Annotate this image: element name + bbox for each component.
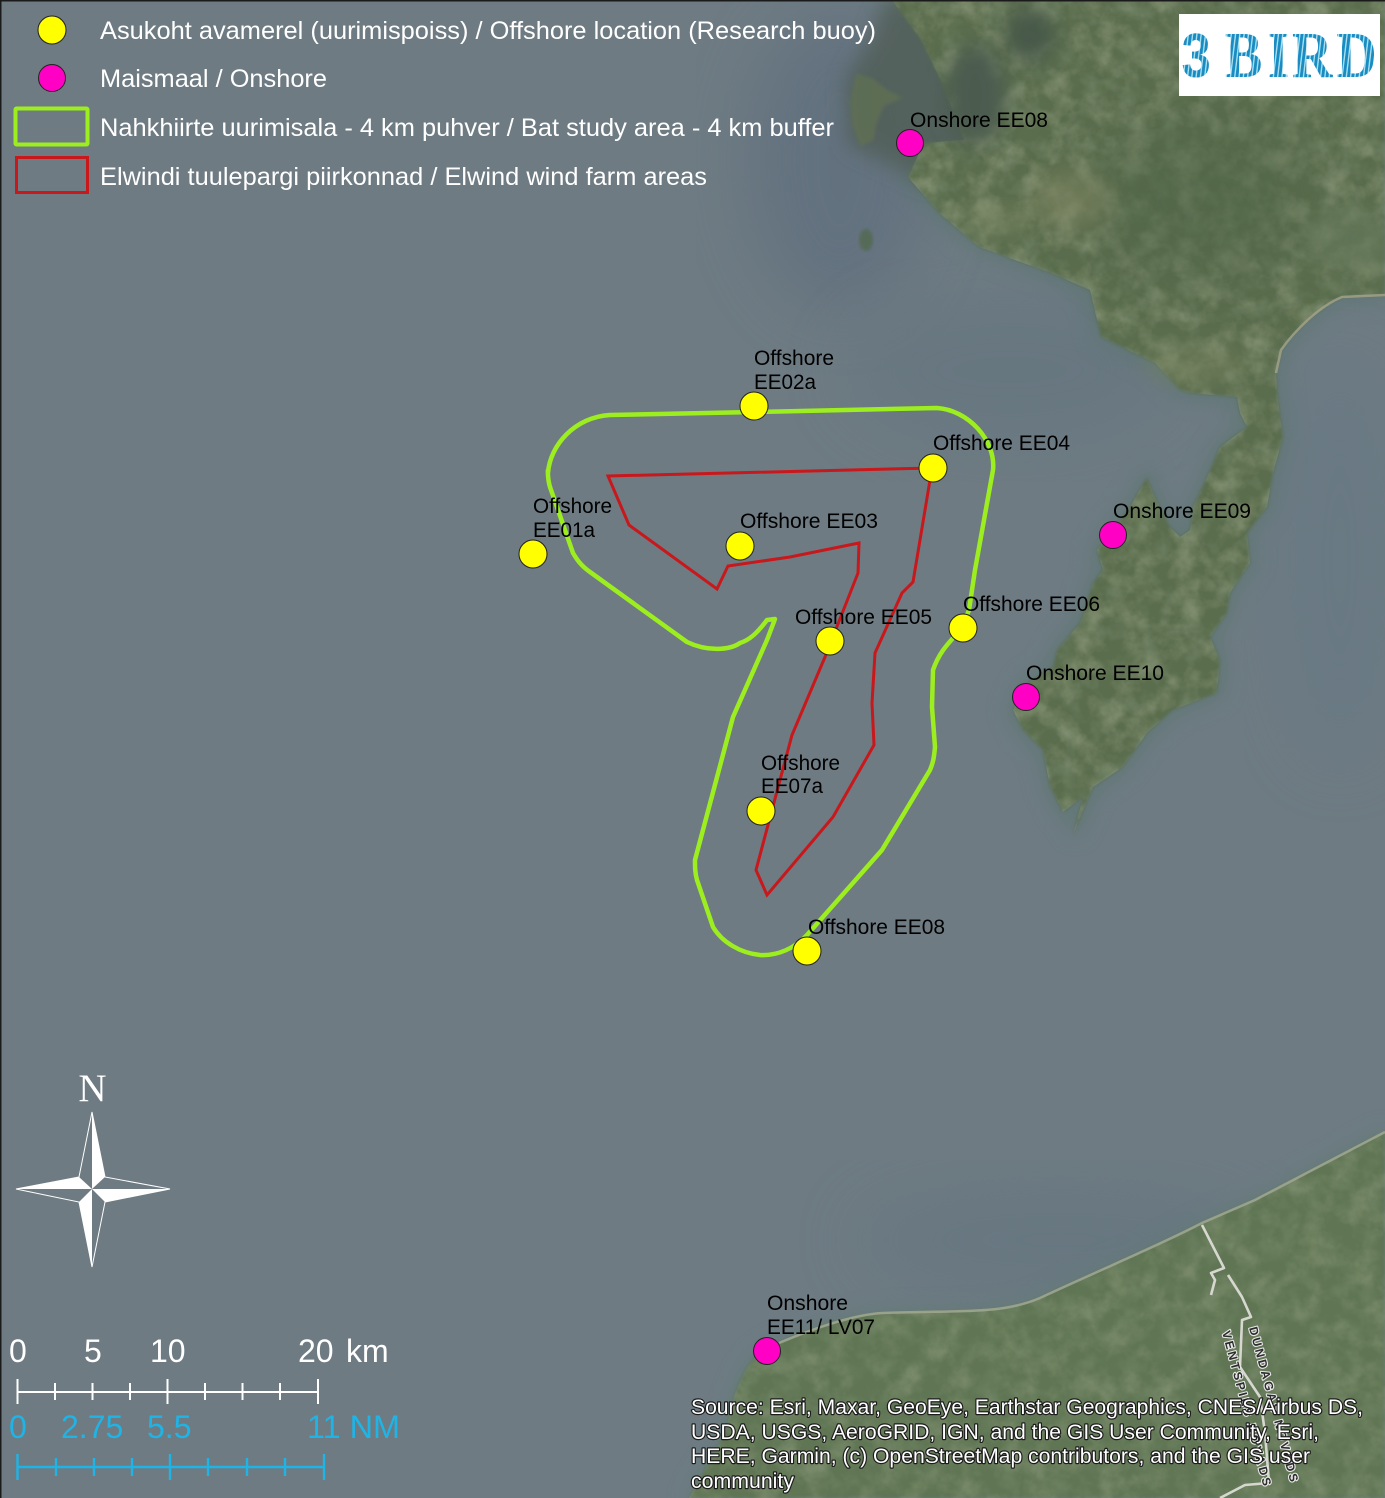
scale bar: kilometres: 20 — [298, 1333, 334, 1369]
road area labels: VENTSPILS NOVADS — [1219, 1329, 1274, 1487]
station labels: Offshore EE06 — [963, 592, 1100, 616]
station labels: Offshore EE03 — [740, 509, 878, 533]
station labels: Offshore EE04 — [933, 431, 1070, 455]
scale bar: kilometres: 10 — [150, 1333, 186, 1369]
station labels: Onshore EE10 — [1026, 661, 1164, 685]
legend — [16, 16, 876, 192]
logo: 3BIRD: 3BIRD — [1182, 19, 1377, 92]
lighter cleared patches — [1030, 170, 1110, 230]
north arrow — [16, 1067, 170, 1267]
scale bar: kilometres: 0 — [9, 1333, 27, 1369]
legend: wind farm symbol — [16, 158, 88, 192]
legend: onshore text: Maismaal / Onshore — [100, 65, 327, 93]
bay shoreline — [1276, 295, 1385, 373]
scale bar: nautical miles: 0 — [9, 1409, 27, 1445]
dark shallows around the northern bay and islands — [845, 0, 985, 185]
Elwind wind farm areas: red outline — [608, 468, 932, 895]
land: northern coast and peninsula — [850, 0, 1385, 835]
scale bar: kilometres — [9, 1333, 389, 1404]
bat study area: green 4 km buffer outline — [548, 408, 993, 955]
station labels: EE01a — [533, 518, 595, 542]
station labels: EE02a — [754, 370, 816, 394]
station labels: Offshore EE05 — [795, 605, 932, 629]
scale bar: nautical miles: 11 NM — [307, 1409, 400, 1445]
road area labels — [1219, 1325, 1301, 1487]
small island — [859, 229, 873, 251]
source attribution: HERE, Garmin, (c) OpenStreetMap contributors, and the GIS user — [691, 1444, 1310, 1468]
onshore locations: magenta markers — [754, 130, 1126, 1364]
land: southern coast — [689, 1132, 1385, 1498]
legend: offshore symbol — [38, 16, 66, 44]
scale bar: kilometres: 5 — [84, 1333, 102, 1369]
north arrow: N — [78, 1067, 107, 1110]
scale bar: nautical miles — [9, 1409, 400, 1480]
station labels: Onshore — [767, 1291, 848, 1315]
legend: offshore text: Asukoht avamerel (uurimispoiss) / Offshore location (Research buoy) — [100, 17, 876, 45]
station labels: Onshore EE08 — [910, 108, 1048, 132]
legend: wind farm text: Elwindi tuulepargi piirkonnad / Elwind wind farm areas — [100, 163, 707, 191]
station labels: Offshore — [754, 346, 834, 370]
station labels: Offshore EE08 — [808, 915, 945, 939]
shallow water halo along the coasts — [689, 0, 1385, 1498]
source attribution: USDA, USGS, AeroGRID, IGN, and the GIS User Community, Esri, — [691, 1420, 1319, 1444]
source attribution — [691, 1395, 1363, 1493]
legend: study area text: Nahkhiirte uurimisala - 4 km puhver / Bat study area - 4 km buffer — [100, 114, 834, 142]
dark bays and forest — [945, 45, 1005, 145]
offshore locations: yellow markers — [519, 392, 977, 965]
legend: onshore symbol — [38, 64, 66, 92]
scale bar: nautical miles: 2.75 — [61, 1409, 123, 1445]
station labels — [533, 108, 1251, 1339]
station labels: Onshore EE09 — [1113, 499, 1251, 523]
station labels: Offshore — [533, 494, 612, 518]
station labels: Offshore — [761, 751, 840, 775]
roads — [1202, 1225, 1269, 1498]
scale bar: kilometres: km — [346, 1333, 389, 1369]
source attribution: Source: Esri, Maxar, GeoEye, Earthstar Geographics, CNES/Airbus DS, — [691, 1395, 1363, 1419]
road area labels: DUNDAGAS NOVADS — [1246, 1325, 1301, 1483]
station labels: EE11/ LV07 — [767, 1315, 875, 1339]
sea tone variation — [750, 10, 1385, 1290]
station labels: EE07a — [761, 774, 823, 798]
scale bar: nautical miles: 5.5 — [147, 1409, 191, 1445]
legend: study area symbol — [16, 108, 88, 144]
source attribution: community — [691, 1469, 794, 1493]
